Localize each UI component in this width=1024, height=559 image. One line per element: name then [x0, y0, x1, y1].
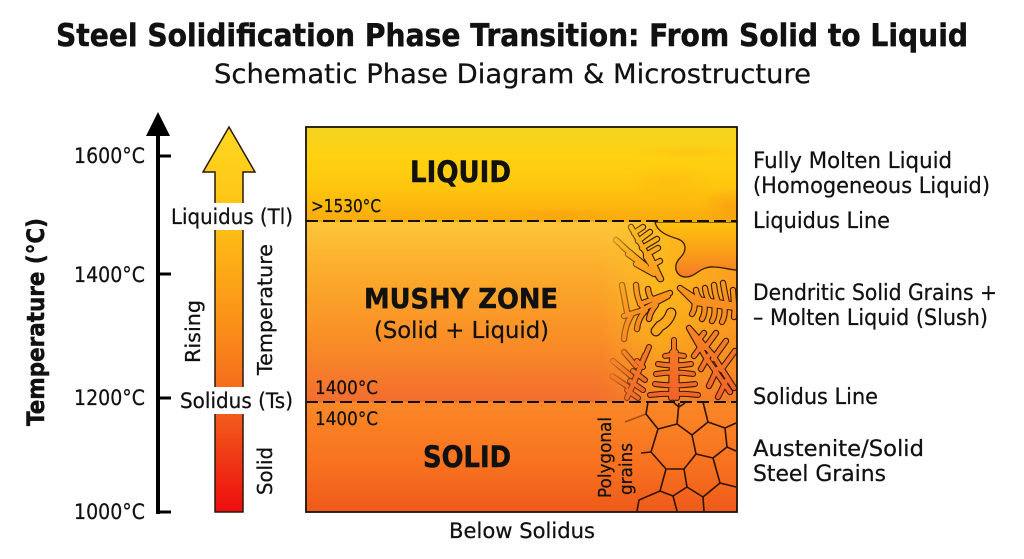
rotated label: temperature: Temperature [253, 244, 277, 376]
right label: fully molten liquid: (Homogeneous Liquid) [753, 174, 990, 199]
right label: austenite grains: Austenite/Solid [753, 437, 924, 462]
liquid colour patches [554, 150, 736, 216]
phase diagram panel [306, 127, 764, 512]
right label: dendritic grains [753, 281, 997, 331]
right label: dendritic grains: Dendritic Solid Grains + [753, 281, 997, 306]
label: liquid: LIQUID [410, 155, 511, 189]
label: above 1530: >1530°C [311, 196, 381, 217]
dendrite arms [612, 227, 736, 398]
label: solid: SOLID [423, 440, 511, 474]
label: mushy zone: MUSHY ZONE [364, 282, 558, 315]
label: below solidus: Below Solidus [449, 519, 595, 543]
label: lower 1400: 1400°C [315, 408, 378, 430]
temperature axis [74, 112, 171, 524]
arrow label: liquidus: Liquidus (Tl) [171, 205, 293, 229]
rising temperature arrow [168, 127, 296, 512]
solidus dashed line [306, 401, 737, 403]
rotated label: rising: Rising [181, 300, 205, 363]
label: upper 1400: 1400°C [315, 377, 378, 399]
dendrite 2 [622, 285, 670, 339]
subtitle: Schematic Phase Diagram & Microstructure [214, 59, 811, 90]
right label: fully molten liquid [753, 149, 990, 199]
label: polygonal grains [595, 417, 637, 498]
dendrites microstructure [612, 222, 737, 398]
temperature axis: 1200°C [74, 386, 145, 410]
panel border [306, 127, 737, 512]
dendrite 4 [680, 283, 736, 322]
temperature axis: 1600°C [74, 144, 145, 168]
liquid pocket [655, 222, 737, 277]
solid bean [656, 313, 671, 331]
right label: liquidus line: Liquidus Line [753, 209, 890, 234]
liquidus dashed line [306, 220, 737, 222]
temperature axis: 1400°C [74, 263, 145, 287]
liquid zone background [306, 127, 737, 222]
arrow label: solidus: Solidus (Ts) [180, 389, 293, 413]
rotated label: solid: Solid [253, 447, 277, 495]
right label: austenite grains [753, 437, 924, 487]
mushy zone background [306, 222, 737, 402]
solid zone background [306, 402, 737, 512]
label: polygonal grains: Polygonal [595, 417, 616, 498]
temperature axis title: Temperature (°C) [22, 218, 50, 426]
right label: dendritic grains: – Molten Liquid (Slush) [753, 306, 988, 331]
right label: solidus line: Solidus Line [753, 385, 878, 410]
right label: austenite grains: Steel Grains [753, 462, 886, 487]
label: solid plus liquid: (Solid + Liquid) [374, 318, 549, 344]
temperature axis: 1000°C [74, 500, 145, 524]
mushy zone right-side tint [616, 222, 736, 402]
label: polygonal grains: grains [616, 443, 637, 495]
right label: fully molten liquid: Fully Molten Liquid [753, 149, 952, 174]
polygonal grains [625, 402, 736, 511]
dendrite 7 [612, 347, 649, 398]
dendrite 5 [689, 328, 735, 397]
dendrite 6 [650, 340, 698, 398]
dendrite 1 [616, 227, 661, 279]
